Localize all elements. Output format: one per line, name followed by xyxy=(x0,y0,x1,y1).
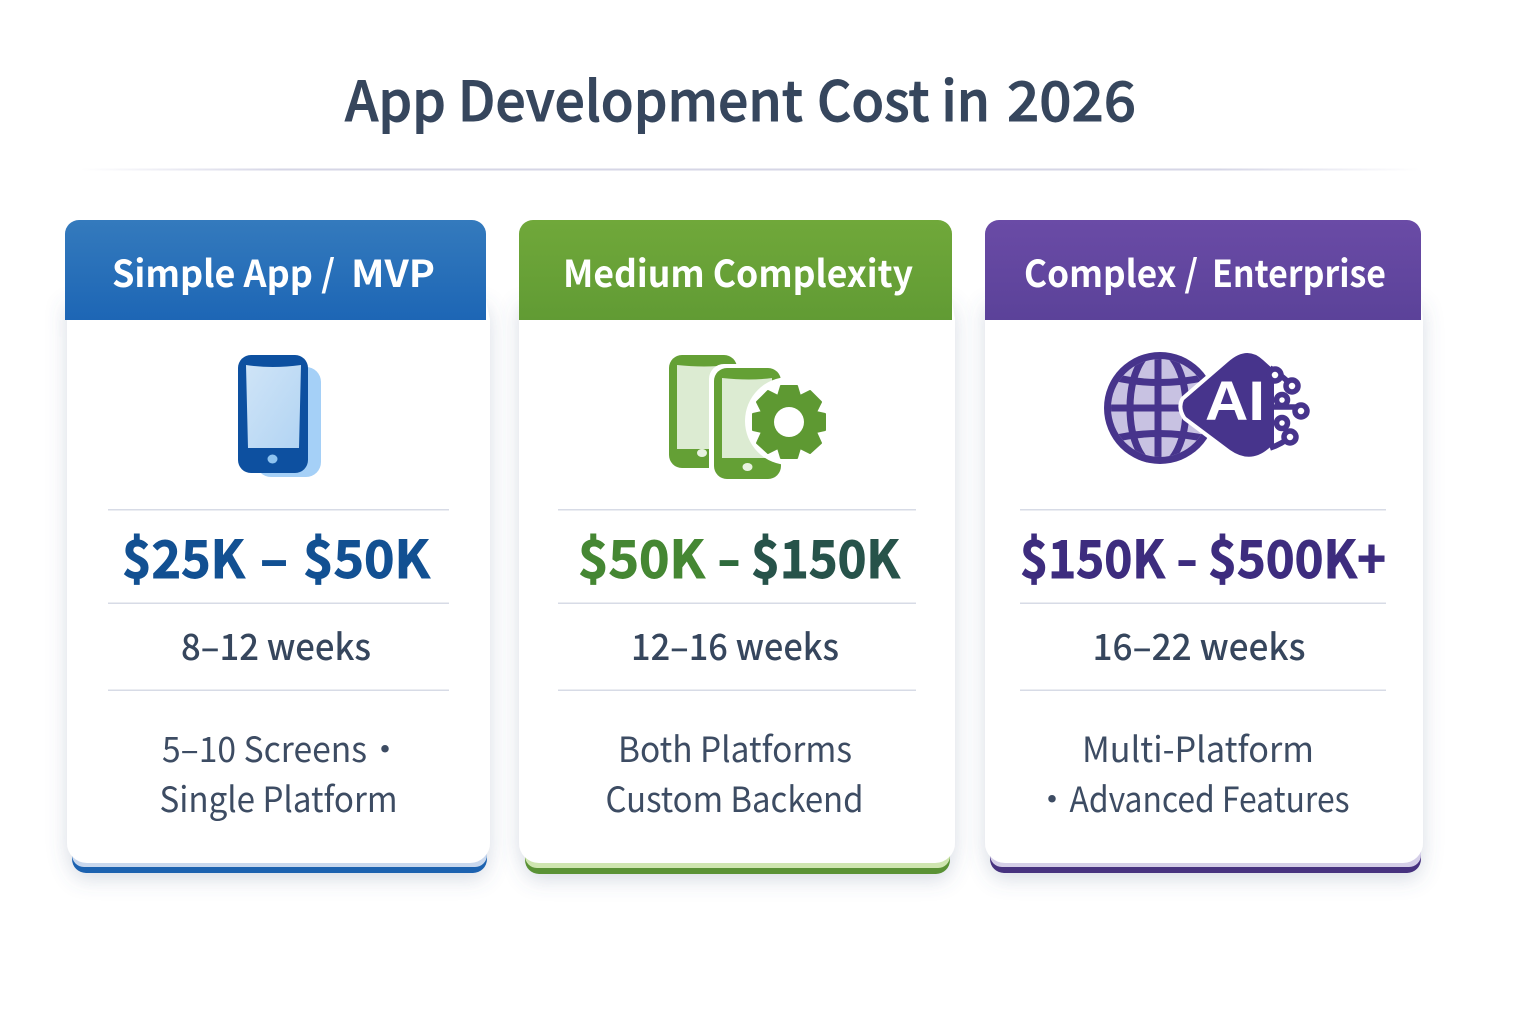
title: Cost in xyxy=(817,57,990,137)
features xyxy=(606,722,864,823)
features xyxy=(160,722,403,823)
header: simple app: MVP xyxy=(351,244,435,298)
price: – xyxy=(1177,518,1197,593)
price: – xyxy=(260,518,288,593)
panel: complex enterprise xyxy=(985,220,1423,873)
timeline: 8–12 weeks xyxy=(181,619,371,671)
header: medium: Medium Complexity xyxy=(563,244,913,298)
price xyxy=(578,518,900,593)
panel: simple app xyxy=(65,220,490,873)
icon: phone xyxy=(238,355,321,477)
features: • xyxy=(367,722,403,773)
header: complex: Enterprise xyxy=(1212,244,1386,298)
price: $500K+ xyxy=(1208,518,1386,593)
title xyxy=(345,57,1136,137)
features: • xyxy=(1034,772,1070,823)
features: Custom Backend xyxy=(606,772,864,823)
price: $50K xyxy=(303,518,430,593)
icon: globe and AI: AI xyxy=(1205,369,1265,432)
card body: medium xyxy=(519,300,955,874)
title: App Development xyxy=(345,57,803,137)
header: simple app: Simple App / xyxy=(112,244,335,298)
features: Single Platform xyxy=(160,772,398,823)
price: $150K xyxy=(751,518,900,593)
price: $25K xyxy=(122,518,245,593)
icon: globe and AI xyxy=(1104,350,1307,466)
header: simple app xyxy=(65,220,486,320)
timeline: 16–22 weeks xyxy=(1092,619,1306,671)
features: Multi-Platform xyxy=(1082,722,1314,773)
header: complex xyxy=(985,220,1421,320)
panel: medium complexity xyxy=(519,220,955,874)
card body: simple app xyxy=(65,300,490,873)
features xyxy=(1034,722,1350,823)
header: complex: Complex / xyxy=(1024,244,1198,298)
icon: phones and gear xyxy=(669,355,833,483)
title: 2026 xyxy=(1007,57,1136,137)
header: medium xyxy=(519,220,952,320)
features: Both Platforms xyxy=(618,722,852,773)
price xyxy=(1020,518,1386,593)
card body: complex xyxy=(985,300,1423,873)
price xyxy=(122,518,430,593)
price: $50K xyxy=(578,518,705,593)
features: Advanced Features xyxy=(1070,772,1350,823)
timeline: 12–16 weeks xyxy=(631,619,839,671)
price: $150K xyxy=(1020,518,1165,593)
features: 5–10 Screens xyxy=(162,722,367,773)
price: – xyxy=(718,518,740,593)
